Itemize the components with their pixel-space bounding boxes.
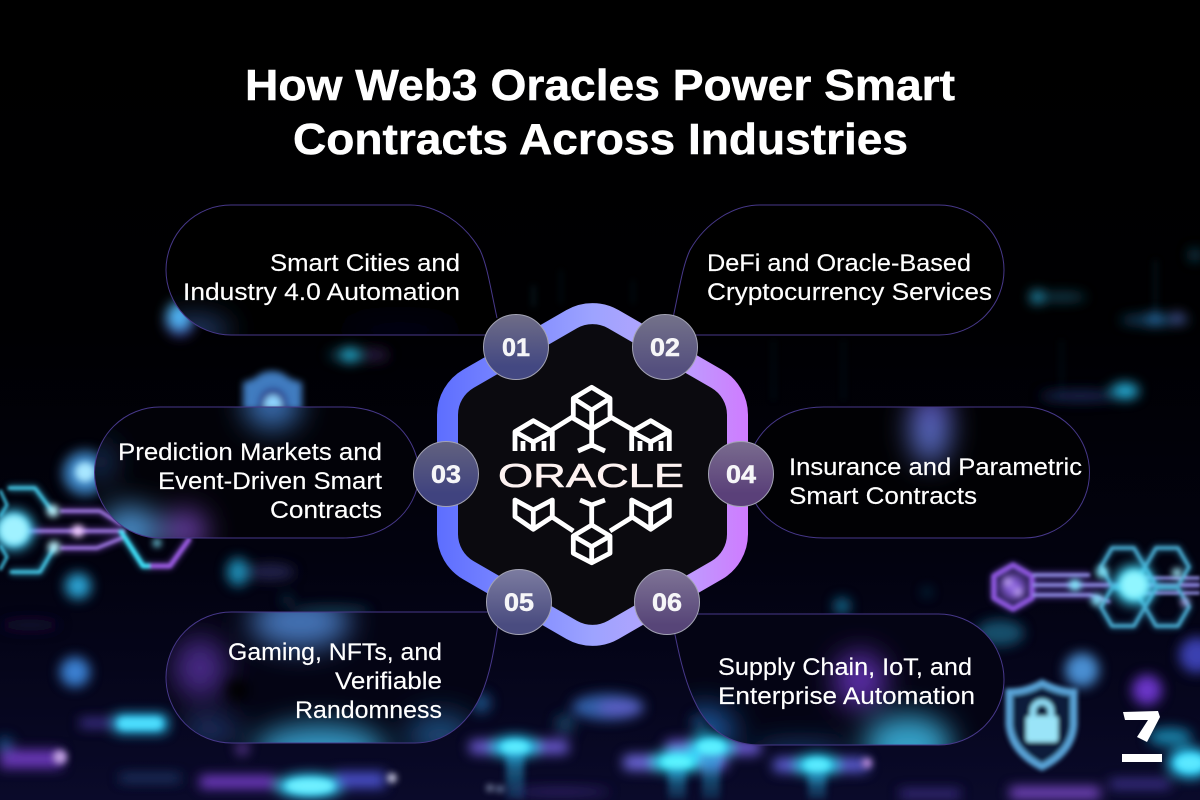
number badge 06: 06	[652, 589, 682, 617]
card 03: Prediction Markets	[86, 381, 420, 554]
card 05: Gaming: Gaming, NFTs, and	[228, 639, 442, 666]
title: How Web3 Oracles Power Smart	[245, 61, 955, 110]
card 04: Insurance: Insurance and Parametric	[789, 454, 1082, 481]
card 06: Supply Chain	[674, 614, 1004, 746]
card 04: Insurance: Smart Contracts	[789, 483, 977, 510]
number badge 01: 01	[502, 334, 530, 362]
card 02: DeFi: Cryptocurrency Services	[707, 279, 992, 306]
Oracle logo	[498, 387, 684, 563]
number badge 02	[632, 314, 698, 380]
left circuit glow	[8, 488, 1200, 626]
card 02: DeFi: DeFi and Oracle-Based	[707, 250, 971, 277]
title: Contracts Across Industries	[293, 115, 908, 164]
card 06: Supply Chain: Enterprise Automation	[718, 683, 975, 710]
icon: blockchain cubes top	[515, 387, 669, 451]
number badge 05: 05	[504, 589, 534, 617]
card 06: Supply Chain: Supply Chain, IoT, and	[718, 654, 972, 681]
central hexagon with gradient ring	[448, 314, 738, 635]
card 05: Gaming	[166, 612, 498, 744]
number badge 01	[484, 314, 548, 380]
card 05: Gaming: Verifiable	[335, 668, 442, 695]
card 04: Insurance	[745, 392, 1090, 538]
number badge 02: 02	[650, 334, 680, 362]
card 03: Prediction Markets: Prediction Markets and	[118, 439, 382, 466]
card 03: Prediction Markets: Event-Driven Smart	[158, 468, 382, 495]
icon: blockchain cubes bottom	[515, 500, 669, 563]
icon: brand logo mark	[1122, 711, 1162, 762]
card 03: Prediction Markets: Contracts	[270, 497, 382, 524]
card 01: Smart Cities: Smart Cities and	[270, 250, 460, 277]
card 05: Gaming: Randomness	[295, 697, 442, 724]
number badge 04	[708, 442, 774, 506]
card 02: DeFi	[670, 205, 1004, 335]
number badge 06	[634, 570, 700, 634]
number badge 03	[414, 442, 478, 506]
card 01: Smart Cities	[160, 205, 500, 342]
logo wordmark: ORACLE	[498, 457, 684, 494]
title	[245, 61, 955, 164]
card 01: Smart Cities: Industry 4.0 Automation	[183, 279, 460, 306]
number badge 05	[486, 570, 552, 634]
number badge 04: 04	[726, 461, 756, 489]
number badge 03: 03	[431, 461, 461, 489]
